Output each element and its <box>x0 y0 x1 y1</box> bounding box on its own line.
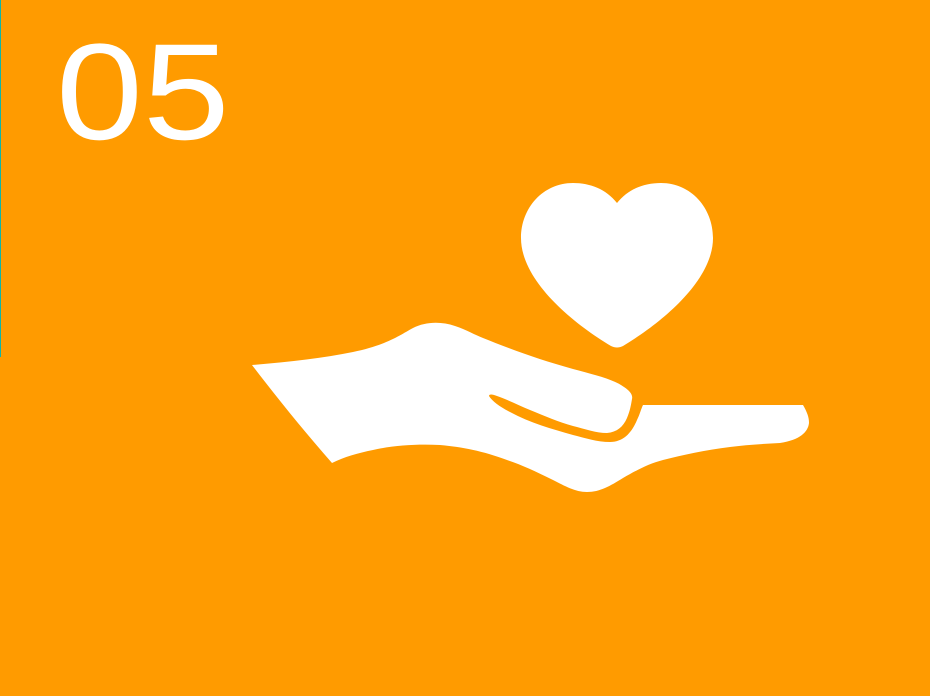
icon: heart <box>521 183 713 348</box>
icon: open hand <box>252 323 809 492</box>
teal edge strip <box>0 0 1 357</box>
number heading: 05 <box>56 16 230 169</box>
